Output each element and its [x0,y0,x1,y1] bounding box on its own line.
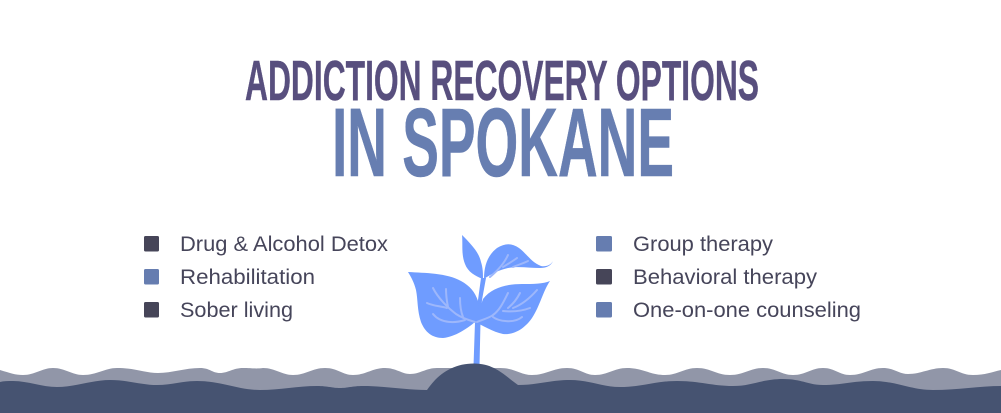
right large leaf [475,281,550,334]
bullet: one-on-one counseling [596,302,612,318]
top left leaf [462,235,483,279]
text: behavioral therapy: Behavioral therapy [633,266,818,289]
right list [596,233,861,322]
bullet: drug and alcohol detox [144,236,159,252]
bullet: behavioral therapy [596,269,612,284]
bullet: sober living [144,302,159,318]
top right leaf [484,244,553,279]
left large leaf [408,272,480,338]
text: one-on-one counseling: One-on-one counseling [633,299,861,322]
bullet: rehabilitation [144,269,159,284]
title: in Spokane: IN SPOKANE [332,88,674,197]
stem [474,278,486,366]
back wave [0,368,1001,413]
bullet: group therapy [596,236,612,252]
leaf veins [427,255,537,322]
left list [144,233,389,322]
text: group therapy: Group therapy [633,233,774,256]
text: drug and alcohol detox: Drug & Alcohol Detox [180,233,389,256]
text: rehabilitation: Rehabilitation [180,266,315,289]
text: sober living: Sober living [180,299,293,322]
front wave and mound [0,364,1001,413]
plant [408,235,553,366]
